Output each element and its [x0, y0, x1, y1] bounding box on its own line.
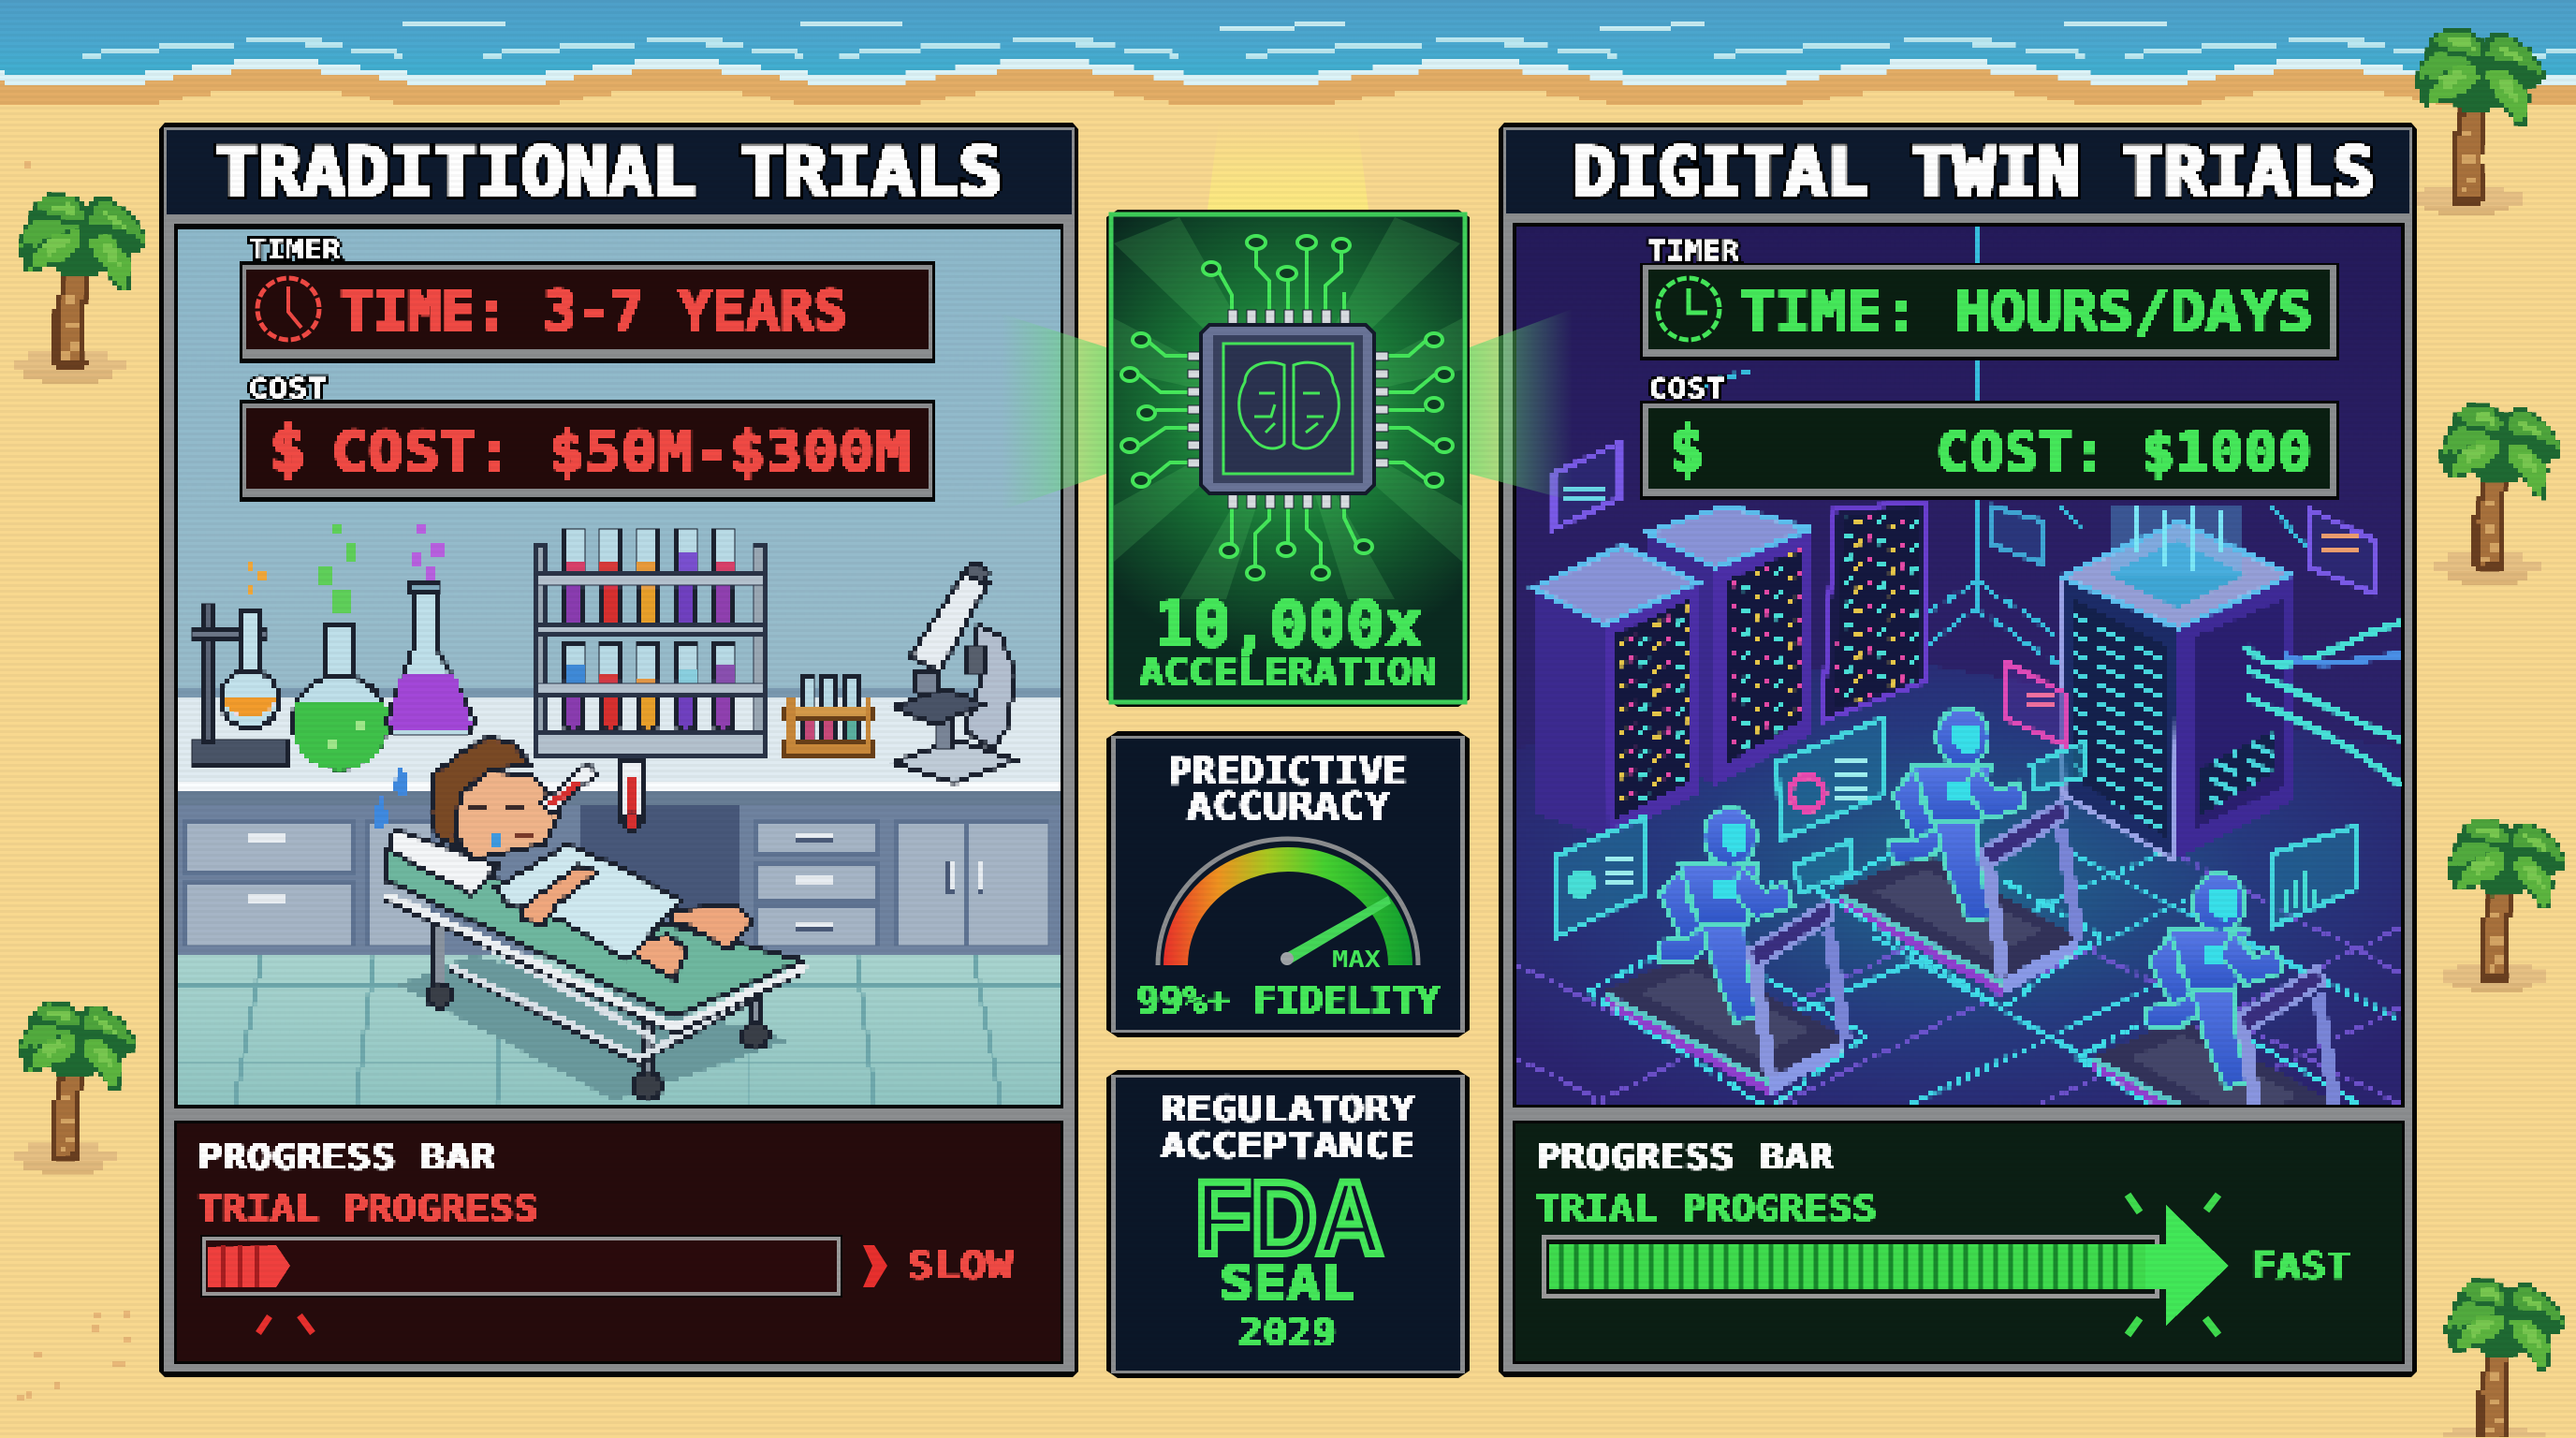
heading: predictive accuracy	[1168, 749, 1407, 829]
palm tree: lower left	[15, 1002, 136, 1173]
floating data panels	[1554, 443, 2375, 937]
progress bar	[200, 1235, 842, 1298]
gauge	[1158, 839, 1418, 973]
heading: regulatory acceptance	[1161, 1089, 1416, 1167]
hair	[431, 737, 532, 850]
slow label: SLOW	[907, 1243, 1013, 1288]
progress label: PROGRESS BAR	[1536, 1137, 1834, 1178]
cost readout: $	[270, 413, 306, 486]
scene: server room with running digital twins	[1515, 227, 2402, 1174]
palm tree: top right	[2411, 28, 2544, 216]
year: 2029	[1238, 1312, 1337, 1355]
server rack 1	[1533, 546, 1697, 837]
arm	[520, 865, 597, 925]
small wooden tube rack	[785, 677, 872, 755]
sand specks	[17, 161, 131, 1401]
ocean and shoreline waves	[0, 0, 2576, 105]
floor tiles	[177, 955, 1061, 1106]
max label: MAX	[1332, 946, 1381, 973]
icon: brain chip	[1188, 310, 1388, 508]
icon: slow chevron	[863, 1245, 887, 1287]
palm tree: right middle	[2436, 404, 2562, 583]
progress label: PROGRESS BAR	[198, 1137, 495, 1178]
patient legs	[627, 905, 753, 980]
glow beam: toward traditional panel	[1002, 314, 1106, 510]
glow beam: toward digital twin panel	[1470, 309, 1573, 501]
floor grid	[1515, 843, 2402, 1105]
palm tree: bottom right	[2441, 1280, 2565, 1438]
microscope	[893, 562, 1016, 783]
retort stand with orange flask	[192, 604, 287, 765]
purple erlenmeyer flask	[386, 584, 476, 735]
server rack 2	[1647, 506, 1810, 785]
gauge needle	[1286, 896, 1391, 964]
circuit traces	[1121, 236, 1453, 580]
palm tree: right lower	[2443, 818, 2567, 993]
icon: fast arrow	[2145, 1205, 2229, 1326]
cost readout: $	[1669, 413, 1705, 486]
trial progress label: TRIAL PROGRESS	[198, 1188, 538, 1229]
heading: digital twin trials: DIGITAL TWIN TRIALS	[1573, 133, 2375, 213]
panel chart marks	[1565, 487, 2359, 912]
patient	[388, 737, 753, 980]
fda logo: FDA	[1195, 1161, 1383, 1276]
green round flask	[293, 625, 388, 770]
bubbles	[248, 522, 443, 612]
sweat drops	[373, 764, 409, 828]
cabinets	[185, 820, 1048, 946]
cost label: COST	[1648, 373, 1725, 404]
timer readout	[1640, 263, 2339, 360]
floor	[1515, 655, 2402, 1105]
stat: fidelity: 99%+ FIDELITY	[1136, 979, 1440, 1022]
icon: clock	[1658, 278, 1720, 340]
header bar	[1506, 130, 2409, 213]
face	[468, 803, 535, 848]
heading: traditional trials: TRADITIONAL TRIALS	[214, 133, 1003, 213]
stat: 10,000x: 10,000x	[1154, 588, 1423, 661]
timer readout: TIME: 3-7 YEARS	[340, 278, 847, 343]
rays	[1114, 217, 1462, 599]
runner: digital twin on treadmill, rear	[1821, 708, 2100, 1008]
card: 10,000x acceleration	[1106, 210, 1470, 707]
heading: regulatory acceptance: REGULATORY	[1161, 1089, 1416, 1131]
palm tree: upper left	[14, 194, 147, 382]
seal label: SEAL	[1220, 1256, 1354, 1312]
stretcher shadow	[398, 955, 791, 1101]
data cables	[2247, 623, 2402, 786]
label: acceleration: ACCELERATION	[1139, 650, 1437, 695]
thermometer in mouth	[541, 763, 597, 814]
timer label: TIMER	[1648, 235, 1740, 267]
pillow	[388, 829, 499, 895]
panel: traditional trials	[159, 123, 1078, 1377]
glow beam: from chip upward	[1208, 122, 1368, 210]
scene: wet lab with sick patient	[177, 227, 1061, 1106]
timer readout	[240, 261, 935, 363]
icon: clock	[257, 278, 319, 340]
card: regulatory acceptance	[1106, 1070, 1470, 1378]
floating thermometer	[622, 762, 642, 830]
runner: digital twin on treadmill, front right	[2077, 873, 2356, 1174]
cost readout: COST: $1000	[1936, 420, 2312, 484]
timer label: TIMER	[248, 234, 342, 266]
progress bar with arrow	[1542, 1205, 2229, 1326]
speed sparks	[2128, 1195, 2218, 1335]
stretcher frame	[386, 850, 807, 1100]
progress ticks	[258, 1315, 313, 1333]
trial progress label: TRIAL PROGRESS	[1536, 1188, 1877, 1229]
progress section	[174, 1121, 1063, 1364]
heading: predictive accuracy: PREDICTIVE	[1168, 749, 1407, 794]
head	[448, 770, 562, 859]
heading: regulatory acceptance: ACCEPTANCE	[1161, 1125, 1415, 1167]
card: predictive accuracy	[1106, 731, 1470, 1037]
cost readout: COST: $50M-$300M	[331, 419, 911, 485]
cost label: COST	[248, 373, 328, 404]
cost readout	[240, 400, 935, 502]
gown	[496, 844, 681, 961]
ceiling guide lines	[1676, 227, 2312, 665]
heading: predictive accuracy: ACCURACY	[1187, 784, 1390, 829]
panel: digital twin trials	[1499, 123, 2417, 1377]
header bar	[167, 130, 1072, 214]
progress section	[1513, 1121, 2405, 1364]
main server with hologram	[2061, 504, 2294, 860]
test tube rack	[534, 529, 765, 755]
runner: digital twin on treadmill, front left	[1588, 808, 1866, 1108]
timer readout: TIME: HOURS/DAYS	[1739, 279, 2313, 344]
fast label: FAST	[2251, 1245, 2351, 1288]
server rack 3	[1822, 502, 1927, 721]
cost readout	[1640, 401, 2339, 500]
